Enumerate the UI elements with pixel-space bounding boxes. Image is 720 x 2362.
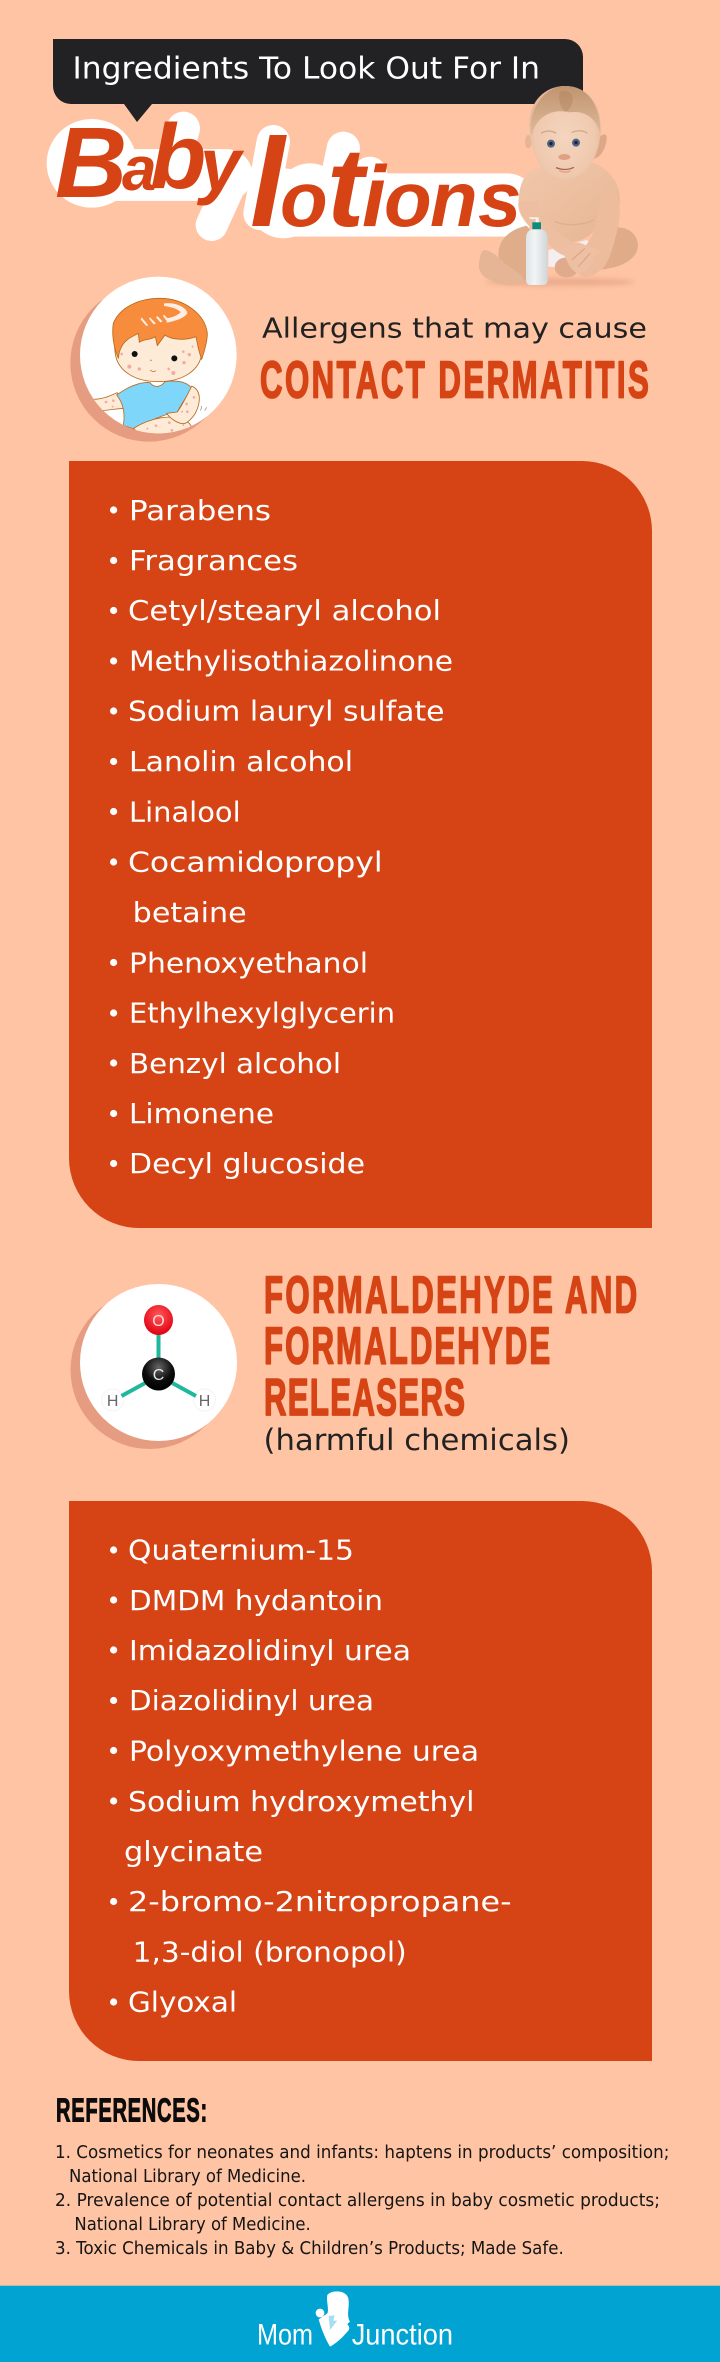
item: Lanolin alcohol: Lanolin alcohol [129, 745, 353, 778]
section heading: formaldehyde [264, 1266, 637, 1457]
item: Ethylhexylglycerin: Ethylhexylglycerin [129, 997, 395, 1030]
item: Glyoxal: Glyoxal [128, 1986, 237, 2019]
item: 2-bromo-2nitropropane-1,3-diol (bronopol): 1,3-diol (bronopol) [133, 1936, 407, 1969]
item: Cocamidopropyl betaine [110, 846, 383, 929]
icon: child with rash [70, 277, 237, 442]
item: Diazolidinyl urea: Diazolidinyl urea [129, 1684, 374, 1717]
icon: formaldehyde molecule [70, 1284, 237, 1449]
speech bubble [53, 39, 583, 122]
bubble heading text: Ingredients To Look Out For In [72, 51, 540, 86]
heading line 1: FORMALDEHYDE AND [264, 1266, 637, 1324]
logo: MomJunction: Junction [352, 2319, 453, 2352]
item: Cocamidopropyl betaine: Cocamidopropyl [128, 846, 383, 879]
panel: allergens list [69, 461, 652, 1228]
item: Cocamidopropyl betaine: betaine [133, 896, 247, 929]
item: 2-bromo-2nitropropane-1,3-diol (bronopol) [110, 1885, 512, 1969]
header title [47, 39, 583, 253]
item: Limonene: Limonene [129, 1097, 274, 1130]
script title: lotions: l [250, 114, 287, 253]
script title: lotions: n [430, 155, 478, 243]
reference 1: National Library of Medicine. [69, 2167, 306, 2187]
script title: lotions: s [478, 155, 521, 243]
script title: Baby: y [196, 123, 245, 206]
heading line 3: RELEASERS [264, 1369, 465, 1427]
item: Sodium hydroxymethyl glycinate: glycinate [124, 1835, 263, 1868]
item: Sodium hydroxymethyl glycinate: Sodium hydroxymethyl [128, 1785, 474, 1818]
icon: formaldehyde molecule: H [199, 1393, 210, 1410]
item: Fragrances: Fragrances [129, 544, 298, 577]
item: DMDM hydantoin: DMDM hydantoin [129, 1584, 383, 1617]
heading line 2: FORMALDEHYDE [264, 1317, 550, 1375]
logo: MomJunction [257, 2291, 453, 2352]
script title: Baby: B [55, 107, 127, 219]
item: Methylisothiazolinone: Methylisothiazolinone [129, 645, 453, 678]
intro line: Allergens that may cause [262, 311, 647, 344]
item: Polyoxymethylene urea: Polyoxymethylene urea [129, 1734, 479, 1767]
item: Quaternium-15: Quaternium-15 [128, 1533, 354, 1566]
icon: formaldehyde molecule: O [152, 1313, 165, 1330]
lotion bottle [526, 217, 548, 285]
section heading: contact dermatitis [260, 311, 649, 409]
reference 2: 2. Prevalence of potential contact allergens in baby cosmetic products; [55, 2191, 660, 2211]
script title: Baby: b [150, 106, 206, 208]
item: Cetyl/stearyl alcohol: Cetyl/stearyl alcohol [128, 594, 441, 627]
condition name: CONTACT DERMATITIS [260, 351, 649, 409]
panel: formaldehyde releasers list [69, 1501, 652, 2061]
item: Benzyl alcohol: Benzyl alcohol [129, 1047, 341, 1080]
reference 1: 1. Cosmetics for neonates and infants: haptens in products’ composition; [55, 2143, 669, 2163]
item: Linalool: Linalool [129, 795, 241, 828]
script title: Baby: a [122, 135, 156, 204]
icon: formaldehyde molecule: H [107, 1393, 118, 1410]
references heading: REFERENCES: [56, 2091, 207, 2129]
item: Imidazolidinyl urea: Imidazolidinyl urea [129, 1634, 411, 1667]
logo: MomJunction: Mom [257, 2319, 313, 2352]
reference 3: 3. Toxic Chemicals in Baby & Children’s Products; Made Safe. [55, 2239, 564, 2259]
references block [55, 2091, 669, 2259]
script title: lotions: o [280, 155, 328, 243]
item: Parabens: Parabens [129, 494, 271, 527]
item: Sodium hydroxymethyl glycinate [110, 1785, 474, 1868]
baby photo illustration with lotion bottle [479, 86, 638, 286]
white sticker outline behind script title [47, 119, 507, 238]
footer bar [0, 2286, 720, 2362]
reference 1 [55, 2143, 669, 2187]
icon: mother and baby silhouette [316, 2291, 350, 2347]
item: Sodium lauryl sulfate: Sodium lauryl sulfate [128, 695, 444, 728]
subtitle: (harmful chemicals) [264, 1423, 570, 1457]
script title: lotions: o [384, 155, 432, 243]
icon: formaldehyde molecule: C [153, 1367, 164, 1384]
item: Decyl glucoside: Decyl glucoside [129, 1147, 365, 1180]
reference 2: National Library of Medicine. [74, 2215, 311, 2235]
reference 2 [55, 2191, 660, 2235]
item: Phenoxyethanol: Phenoxyethanol [129, 947, 368, 980]
script title: lotions: i [362, 149, 388, 245]
item: 2-bromo-2nitropropane-1,3-diol (bronopol): 2-bromo-2nitropropane- [128, 1885, 512, 1918]
script title: lotions: t [327, 125, 369, 250]
